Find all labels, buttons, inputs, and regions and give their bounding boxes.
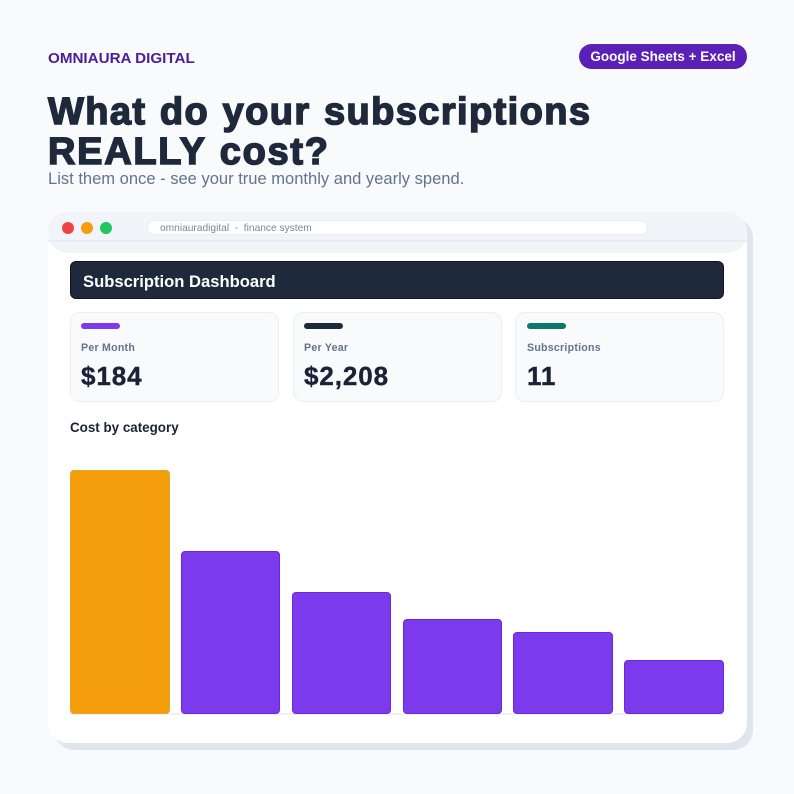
bar chart — [70, 470, 724, 715]
bar 5 — [513, 632, 613, 714]
subtitle: List them once - see your true monthly and yearly spend. — [48, 169, 464, 188]
toolbar divider — [48, 240, 747, 242]
label: Subscriptions — [527, 342, 601, 354]
value: $184 — [81, 361, 142, 391]
icon: amber window dot — [81, 222, 93, 234]
bar 6 — [624, 660, 724, 714]
stat card: per month — [70, 312, 279, 402]
value: $2,208 — [304, 361, 389, 391]
accent bar — [304, 323, 343, 329]
address bar — [147, 220, 648, 235]
bar 4 — [403, 619, 502, 714]
label: Per Month — [81, 342, 135, 354]
title: What do your subscriptions — [48, 91, 591, 133]
brand name: OMNIAURA DIGITAL — [48, 50, 195, 67]
badge: Google Sheets + Excel: Google Sheets + Excel — [590, 49, 736, 64]
value: 11 — [527, 361, 556, 391]
browser toolbar — [48, 212, 747, 253]
stat card: subscriptions — [515, 312, 724, 402]
chart baseline — [70, 713, 724, 715]
badge: Google Sheets + Excel — [579, 44, 747, 69]
bar 1 — [70, 470, 170, 714]
chart heading: Cost by category — [70, 420, 179, 435]
title: REALLY cost? — [48, 131, 330, 173]
dashboard header: Subscription Dashboard — [83, 272, 276, 291]
card shadow — [54, 218, 753, 750]
accent bar — [527, 323, 566, 329]
bar 3 — [292, 592, 391, 714]
accent bar — [81, 323, 120, 329]
stat card: per year — [293, 312, 502, 402]
dashboard header — [70, 261, 724, 299]
icon: red window dot — [62, 222, 74, 234]
title — [47, 91, 591, 173]
label: Per Year — [304, 342, 348, 354]
icon: green window dot — [100, 222, 112, 234]
bar 2 — [181, 551, 280, 714]
panel: dashboard window — [48, 212, 747, 743]
address bar: omniauradigital - finance system — [160, 223, 312, 234]
